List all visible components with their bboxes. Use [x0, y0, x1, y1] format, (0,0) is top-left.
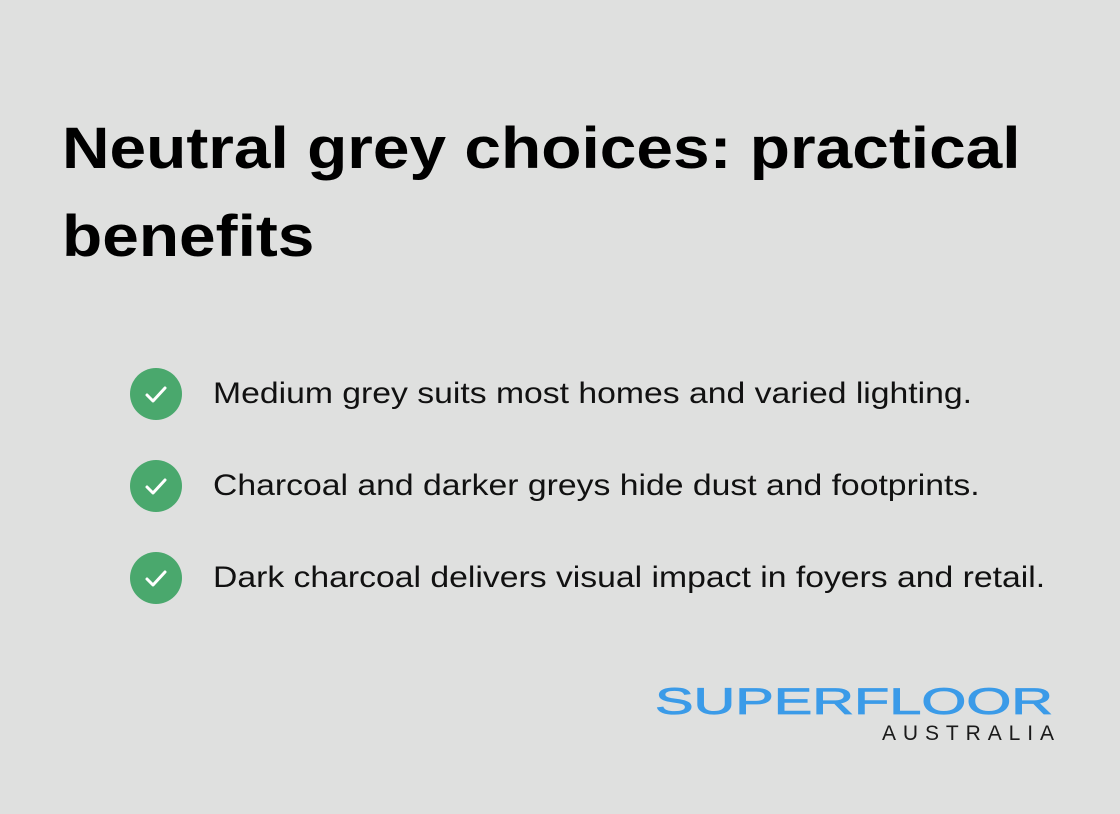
icon: check [130, 460, 182, 512]
text: Charcoal and darker greys hide dust and footprints. [213, 469, 980, 502]
list item 2 [130, 460, 980, 512]
title: Neutral grey choices: practical [62, 116, 1021, 181]
list item 3 [130, 552, 1045, 604]
text: Medium grey suits most homes and varied lighting. [213, 377, 972, 410]
title [62, 116, 1021, 269]
list item 1 [130, 368, 972, 420]
text: Dark charcoal delivers visual impact in foyers and retail. [213, 561, 1045, 594]
logo: SUPERFLOOR [655, 681, 1053, 722]
logo: AUSTRALIA [882, 722, 1054, 745]
icon: check [130, 368, 182, 420]
icon: check [130, 552, 182, 604]
title: benefits [62, 204, 314, 269]
logo [655, 681, 1054, 745]
